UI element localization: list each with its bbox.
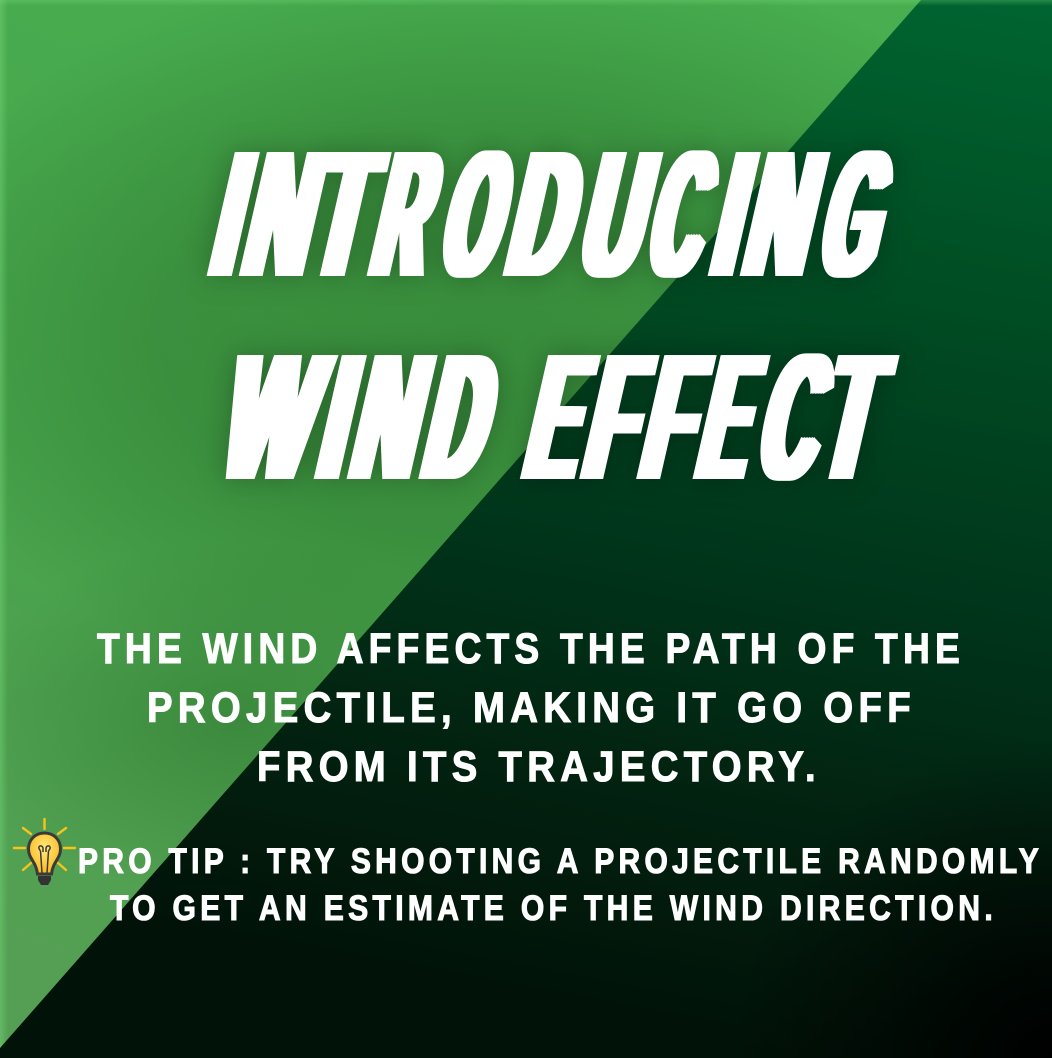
icon: light bulb <box>12 818 76 885</box>
title line 1 <box>199 114 908 315</box>
title: Introducing Wind Effect: D <box>495 114 600 315</box>
title: Introducing Wind Effect: U <box>567 114 671 315</box>
title: Introducing Wind Effect: F <box>628 317 722 518</box>
title: Introducing Wind Effect: T <box>297 114 395 315</box>
title: Introducing Wind Effect: W <box>206 317 341 518</box>
body line 3: FROM ITS TRAJECTORY. <box>257 743 821 791</box>
title: Introducing Wind Effect: O <box>429 114 529 315</box>
title: Introducing Wind Effect: N <box>339 317 446 518</box>
title: Introducing Wind Effect: D <box>410 317 513 518</box>
title: Introducing Wind Effect: F <box>571 317 665 518</box>
title: Introducing Wind Effect: I <box>306 317 375 518</box>
title: Introducing Wind Effect: R <box>360 114 456 315</box>
title: Introducing Wind Effect: N <box>732 114 839 315</box>
title: Introducing Wind Effect: I <box>199 114 268 315</box>
title: Introducing Wind Effect: T <box>806 317 903 518</box>
body line 2: PROJECTILE, MAKING IT GO OFF <box>147 684 916 732</box>
title: Introducing Wind Effect: E <box>512 317 608 518</box>
title: Introducing Wind Effect: C <box>745 317 846 518</box>
title: Introducing Wind Effect: E <box>686 317 778 518</box>
title: Introducing Wind Effect: I <box>700 114 769 315</box>
title: Introducing Wind Effect: C <box>636 114 731 315</box>
title: Introducing Wind Effect: N <box>230 114 339 315</box>
title: Introducing Wind Effect: G <box>807 114 908 315</box>
title line 2 <box>206 317 903 518</box>
